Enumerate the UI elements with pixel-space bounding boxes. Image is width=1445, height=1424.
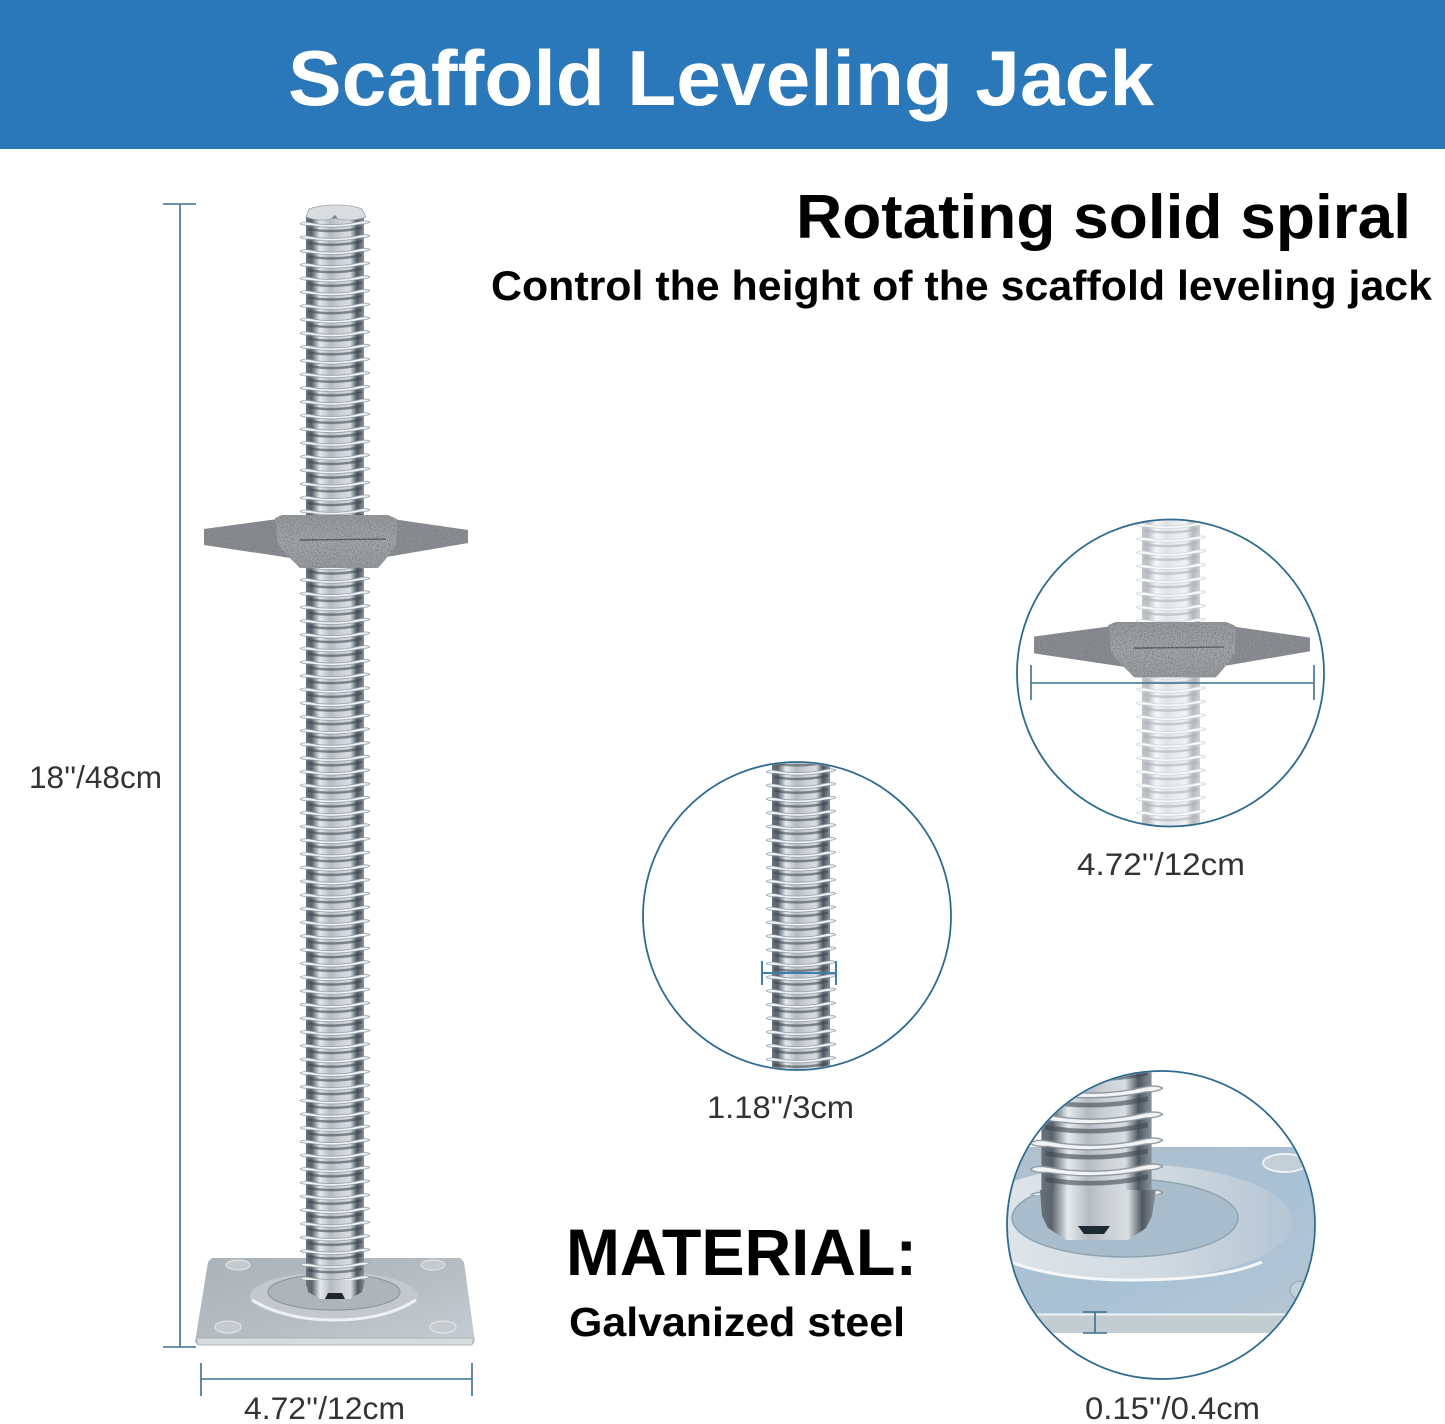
label: height: 18''/48cm: [29, 759, 162, 795]
wing nut: [204, 515, 468, 568]
base width dimension: [201, 1363, 472, 1396]
detail circle: thread diameter: [643, 755, 951, 1080]
thickness dimension: [1083, 1312, 1107, 1333]
label: thread diameter: 1.18''/3cm: [707, 1089, 854, 1125]
height dimension line: [163, 204, 196, 1347]
detail circle: wing nut: [1017, 515, 1324, 835]
wing nut dimension: [1031, 665, 1314, 700]
title: Scaffold Leveling Jack: [288, 34, 1155, 122]
header banner: [0, 0, 1445, 149]
thread close-up: [1030, 1072, 1163, 1195]
wing nut detail: [1034, 622, 1310, 677]
scaffold jack product: [195, 205, 475, 1345]
detail circle: base plate thickness: [1006, 1070, 1316, 1380]
subheading: height control: Control the height of the scaffold leveling jack: [491, 262, 1433, 309]
thread dimension: [762, 961, 836, 985]
threaded rod: [300, 205, 370, 1299]
base plate: [195, 1258, 475, 1345]
heading: rotating solid spiral: Rotating solid spiral: [796, 183, 1411, 252]
material text: Galvanized steel: [569, 1299, 905, 1345]
label: wing nut width: 4.72''/12cm: [1077, 846, 1245, 882]
plate surface: [1000, 1147, 1320, 1315]
material heading: MATERIAL:: [566, 1215, 917, 1289]
